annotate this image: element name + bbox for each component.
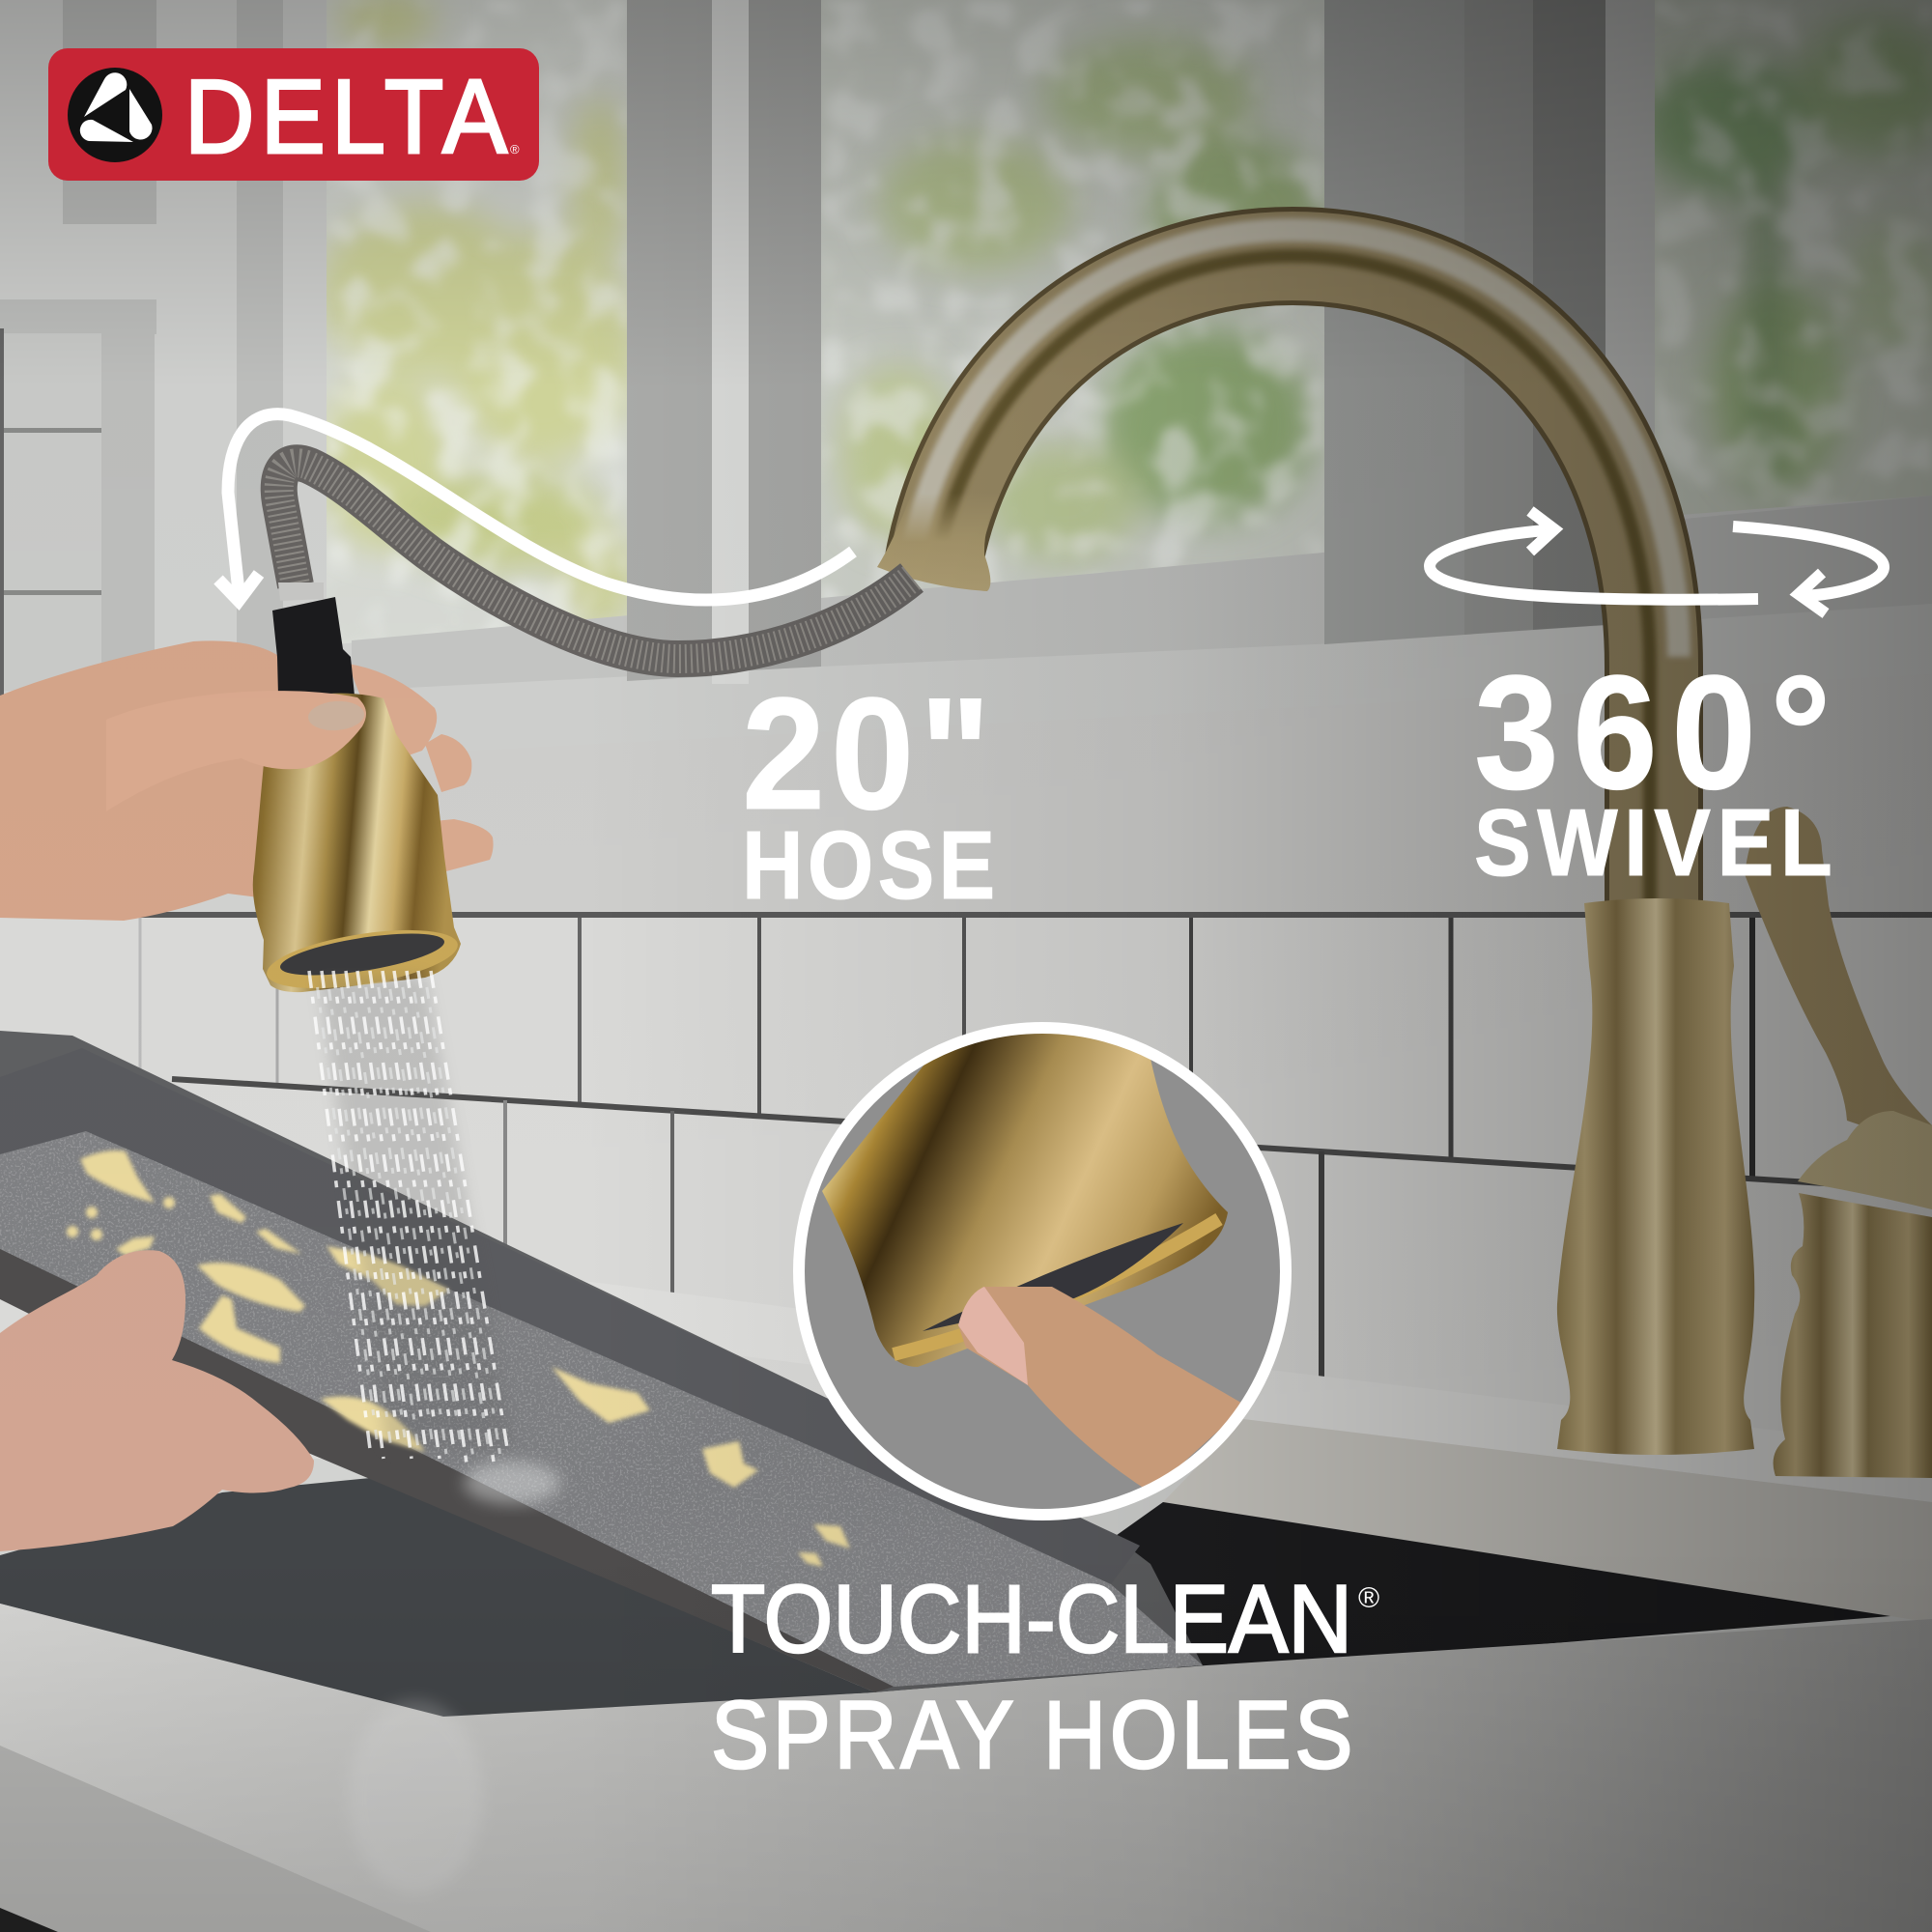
label: 360 swivel: SWIVEL bbox=[1474, 790, 1833, 895]
callout: touch-clean spray holes magnifier bbox=[799, 1014, 1286, 1515]
logo: Delta bbox=[48, 48, 539, 181]
label: touch-clean spray holes bbox=[711, 1566, 1379, 1789]
thumbnail bbox=[307, 699, 365, 732]
label: 20 inch hose: HOSE bbox=[742, 811, 995, 919]
water shadow bbox=[319, 976, 512, 1449]
tray back wall bbox=[0, 1048, 1140, 1584]
tray front rim bbox=[0, 1249, 894, 1692]
wall below sill bbox=[319, 674, 1932, 918]
fingernail bbox=[958, 1287, 1028, 1385]
spout bell tip bbox=[877, 493, 1000, 591]
back counter top bbox=[502, 1270, 1932, 1502]
label: touch-clean spray holes: TOUCH-CLEAN bbox=[711, 1566, 1352, 1673]
spray nozzle bbox=[277, 925, 447, 983]
faucet body bbox=[1557, 898, 1754, 1455]
handle cap bbox=[1798, 1111, 1932, 1209]
finger pressing nozzle bbox=[958, 1287, 1246, 1492]
magnifier ring bbox=[799, 1028, 1286, 1515]
logo wordmark: DELTA bbox=[185, 58, 507, 176]
spray head neck bbox=[272, 597, 355, 696]
magnified nozzle rim bbox=[894, 1219, 1219, 1354]
window pane right bbox=[1642, 0, 1932, 522]
thumb bbox=[106, 691, 366, 811]
hand and spray head bbox=[0, 582, 494, 999]
subway tiles bbox=[0, 912, 1932, 1459]
arrow: hose reach bbox=[218, 414, 853, 601]
logo registered mark: ® bbox=[510, 142, 520, 156]
handle lever bbox=[1745, 807, 1932, 1150]
water reflection bbox=[348, 1700, 483, 1893]
baking tray bbox=[0, 1031, 1217, 1700]
window pane left bbox=[319, 0, 638, 657]
tray speckle bbox=[0, 1111, 1217, 1700]
magnified spray head bbox=[822, 1014, 1246, 1492]
handle base bbox=[1774, 1193, 1932, 1478]
water streams bbox=[309, 971, 508, 1468]
window posts bbox=[627, 0, 1655, 684]
logo badge bbox=[48, 48, 539, 181]
left recess bbox=[63, 0, 156, 224]
label: 20 inch hose: 20" bbox=[742, 665, 991, 842]
lower hand holding tray bbox=[0, 1250, 314, 1551]
front counter bbox=[0, 1604, 1932, 1932]
logo emblem bbox=[68, 68, 162, 162]
hose bbox=[279, 463, 912, 659]
bottom corner shadow bbox=[0, 1908, 58, 1932]
spray head bbox=[253, 694, 461, 992]
left alcove tiles bbox=[0, 299, 156, 696]
label: touch-clean spray holes: ® bbox=[1358, 1582, 1379, 1614]
pane light flecks bbox=[327, 0, 628, 657]
faucet bbox=[877, 230, 1932, 1478]
magnified nozzle holes bbox=[923, 1223, 1183, 1331]
food scraps bbox=[67, 1151, 850, 1567]
pane light flecks bbox=[1655, 0, 1932, 522]
gooseneck spout bbox=[913, 230, 1679, 908]
hand palm bbox=[0, 640, 280, 921]
tray floor bbox=[0, 1131, 1203, 1687]
magnifier background bbox=[799, 1028, 1286, 1515]
window pane centre bbox=[821, 0, 1324, 618]
label: 360 swivel: 360° bbox=[1474, 640, 1831, 823]
arrow: 360 swivel bbox=[1430, 511, 1884, 613]
label: 20 inch hose bbox=[742, 665, 995, 919]
splash bbox=[464, 1462, 560, 1504]
window frame left bbox=[237, 0, 283, 657]
spray nozzle rim bbox=[263, 920, 462, 999]
fingers behind head bbox=[348, 664, 494, 872]
label: touch-clean spray holes: SPRAY HOLES bbox=[711, 1682, 1352, 1789]
counter lower edge bbox=[0, 1746, 431, 1932]
spray hose ferrule bbox=[278, 582, 324, 601]
tray body bbox=[0, 1031, 1203, 1692]
dark sink basin bbox=[0, 1478, 1890, 1719]
water spray bbox=[309, 971, 560, 1504]
pane light flecks bbox=[821, 0, 1324, 618]
window sill bbox=[352, 496, 1932, 773]
counter edge bbox=[1163, 1419, 1932, 1623]
